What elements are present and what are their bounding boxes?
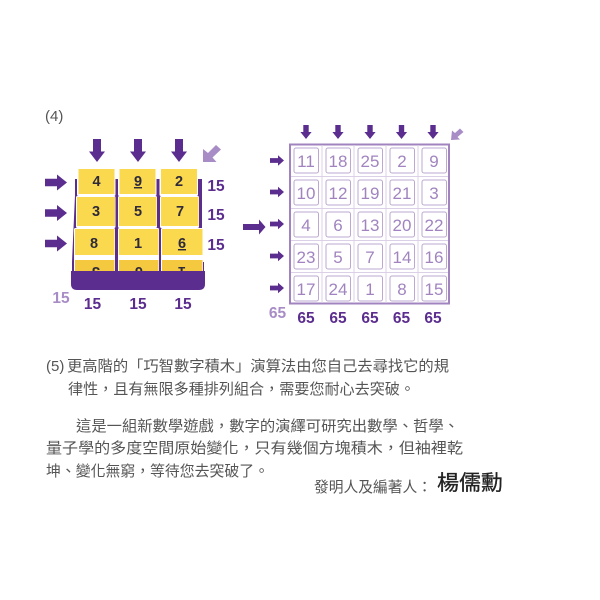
tile row 3 with visible front faces: 6 xyxy=(135,263,143,279)
grid numbers: 20 xyxy=(393,216,411,235)
grid numbers: 15 xyxy=(425,280,443,299)
5x5 magic square grid xyxy=(290,144,449,304)
grid numbers: 3 xyxy=(429,184,439,203)
column sums: 15 xyxy=(174,296,192,313)
grid numbers: 19 xyxy=(361,184,379,203)
diagonal sum of grid: 65 xyxy=(269,305,286,322)
closing paragraph: 坤、變化無窮，等待您去突破了。 xyxy=(46,462,269,480)
column sums of grid: 65 xyxy=(424,310,442,327)
row sums: 15 xyxy=(207,237,225,254)
column sums: 15 xyxy=(129,296,147,313)
tile row 3 with visible front faces: 8 xyxy=(90,236,98,252)
inventor credit: 發明人及編著人： xyxy=(314,479,432,496)
column sums of grid: 65 xyxy=(361,310,379,327)
diagonal arrow xyxy=(203,145,221,162)
tile row 2: 3 xyxy=(92,204,100,220)
label (4): (4) xyxy=(45,108,63,125)
paragraph (5): 律性，且有無限多種排列組合，需要您耐心去突破。 xyxy=(68,380,415,398)
grid numbers: 4 xyxy=(301,216,311,235)
tile row 3 with visible front faces: 3 xyxy=(92,263,100,279)
tile row 1: 9 xyxy=(134,174,142,190)
column sums of grid: 65 xyxy=(329,310,347,327)
grid numbers: 17 xyxy=(297,280,315,299)
grid numbers: 24 xyxy=(329,280,347,299)
grid numbers: 12 xyxy=(329,184,347,203)
grid numbers: 7 xyxy=(365,248,375,267)
paragraph (5): (5) xyxy=(46,358,64,375)
grid numbers: 18 xyxy=(329,152,347,171)
tile row 1 xyxy=(77,168,198,196)
grid numbers: 25 xyxy=(361,152,379,171)
grid numbers: 13 xyxy=(361,216,379,235)
column sums xyxy=(84,296,192,313)
paragraph (5) xyxy=(46,357,449,398)
grid numbers: 11 xyxy=(297,152,315,171)
grid numbers xyxy=(297,152,443,299)
arrows pointing down over columns xyxy=(89,139,187,162)
puzzle box with 3x3 blocks xyxy=(71,168,205,290)
row sums: 15 xyxy=(207,178,225,195)
purple tray xyxy=(72,179,204,272)
paragraph (5): 更高階的「巧智數字積木」演算法由您自己去尋找它的規 xyxy=(67,357,449,375)
grid numbers: 2 xyxy=(397,152,407,171)
grid numbers: 9 xyxy=(429,152,439,171)
arrows pointing right at rows xyxy=(45,174,67,252)
column sums of grid: 65 xyxy=(393,310,410,327)
inventor credit xyxy=(314,471,503,496)
diagonal sum: 15 xyxy=(52,290,70,307)
closing paragraph xyxy=(46,417,463,480)
row sums xyxy=(207,178,225,254)
grid numbers: 8 xyxy=(397,280,407,299)
large arrow pointing at centre row xyxy=(243,220,266,234)
grid numbers: 6 xyxy=(333,216,343,235)
grid numbers: 5 xyxy=(333,248,343,267)
tile row 3 with visible front faces: 1 xyxy=(134,236,142,252)
column sums: 15 xyxy=(84,296,101,313)
tile row 3 with visible front faces: 6 xyxy=(178,236,186,252)
handwritten signature: 楊儒勳 xyxy=(437,471,503,495)
column sums of grid xyxy=(297,310,442,327)
grid numbers: 16 xyxy=(425,248,443,267)
grid numbers: 1 xyxy=(365,280,375,299)
tray front wall xyxy=(71,271,205,290)
grid numbers: 21 xyxy=(393,184,411,203)
grid numbers: 10 xyxy=(297,184,315,203)
small arrows pointing right beside grid xyxy=(270,155,284,293)
grid numbers: 23 xyxy=(297,248,315,267)
tile row 2: 7 xyxy=(176,204,184,220)
tile row 2 xyxy=(76,196,199,228)
closing paragraph: 量子學的多度空間原始變化，只有幾個方塊積木，但袖裡乾 xyxy=(46,439,463,457)
column sums of grid: 65 xyxy=(297,310,315,327)
tile row 1: 2 xyxy=(175,174,183,190)
tile row 3 with visible front faces xyxy=(74,228,203,279)
small diagonal arrow xyxy=(451,128,464,140)
small arrows pointing down above grid xyxy=(300,125,439,139)
tile row 1: 4 xyxy=(92,174,101,190)
row sums: 15 xyxy=(207,207,225,224)
tile row 2: 5 xyxy=(134,204,142,220)
closing paragraph: 這是一組新數學遊戲，數字的演繹可研究出數學、哲學、 xyxy=(76,417,459,435)
tile row 3 with visible front faces: 1 xyxy=(178,263,186,279)
grid numbers: 22 xyxy=(425,216,443,235)
grid numbers: 14 xyxy=(393,248,411,267)
